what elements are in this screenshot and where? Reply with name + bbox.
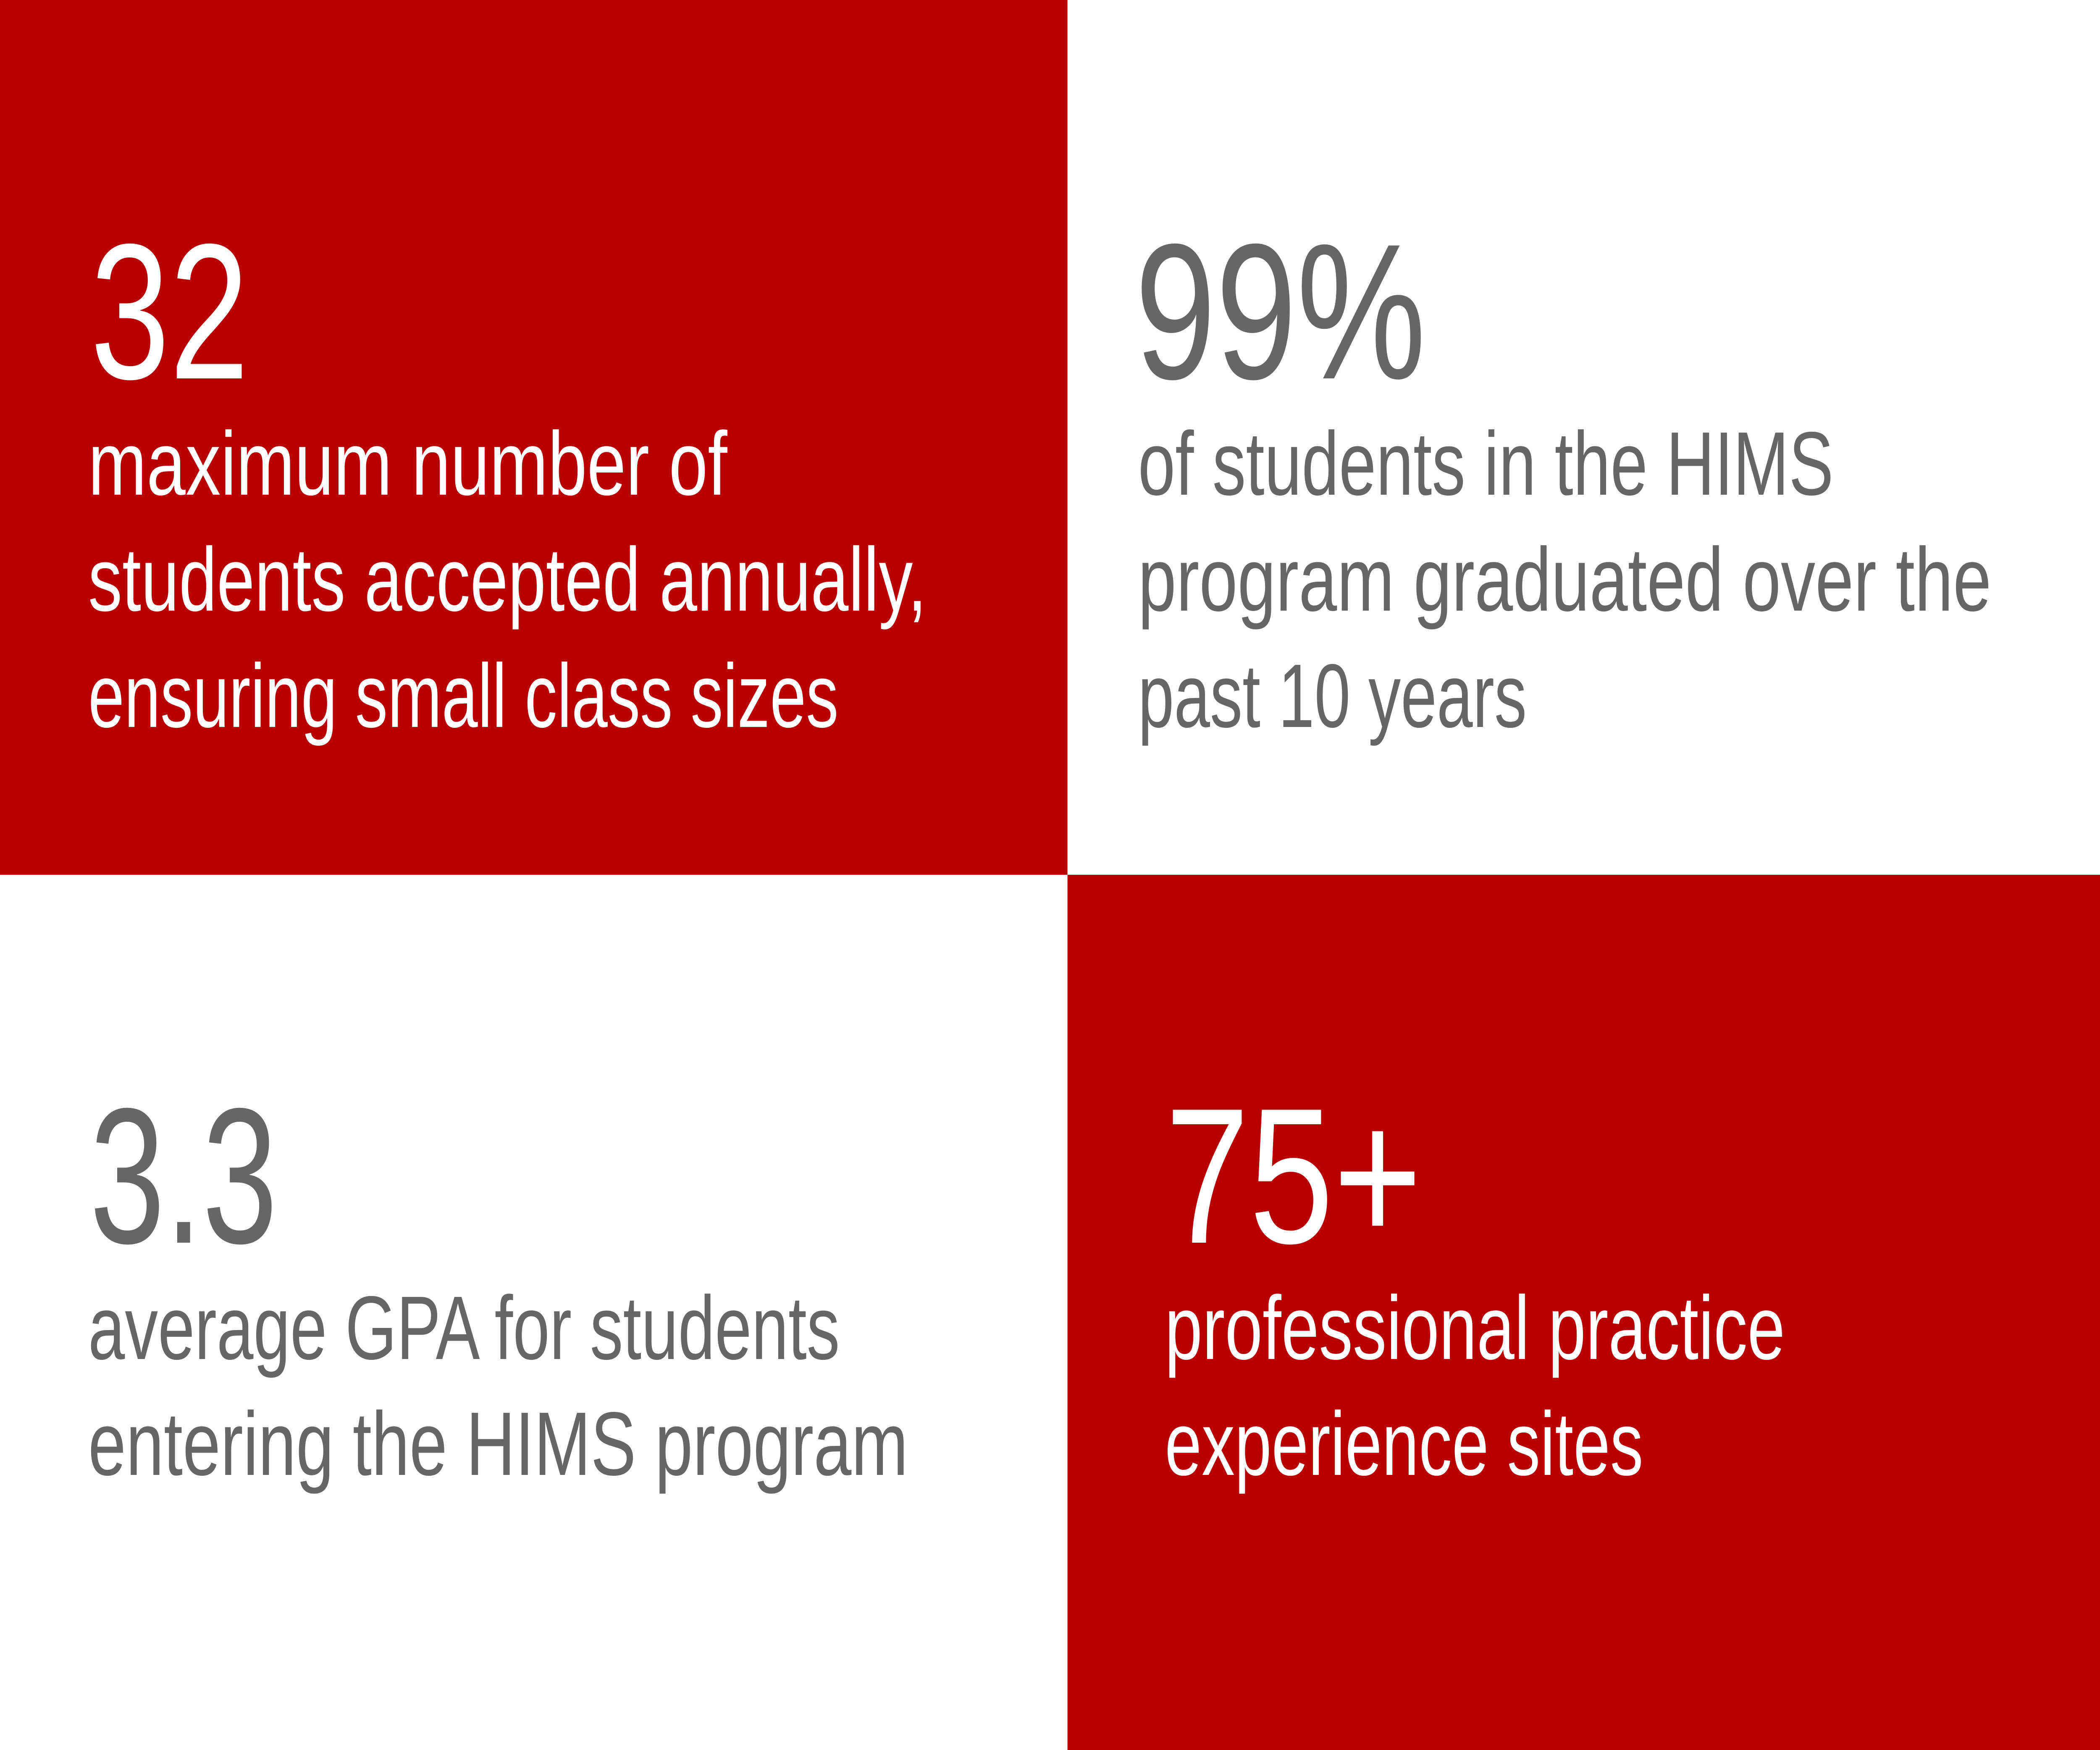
- panel: 99% graduated: [1135, 204, 1991, 746]
- description: maximum number of students: ensuring small class sizes: [88, 646, 838, 746]
- description: professional practice sites: professional practice: [1165, 1278, 1785, 1378]
- stat number: 32: 32: [90, 204, 249, 420]
- panel background: bottom right red: [1068, 875, 2100, 1750]
- description: professional practice sites: experience sites: [1165, 1394, 1643, 1494]
- description: average GPA: average GPA for students: [88, 1278, 840, 1378]
- description: maximum number of students: maximum number of: [88, 414, 728, 514]
- stat number: 99%: 99%: [1135, 204, 1426, 420]
- panel: 32 students: [0, 0, 1068, 875]
- description: average GPA: entering the HIMS program: [88, 1394, 908, 1494]
- panel: 75+ practice sites: [1068, 875, 2100, 1750]
- description: average GPA: [88, 1278, 908, 1494]
- description: students graduated: past 10 years: [1138, 646, 1527, 746]
- stat number: 75+: 75+: [1165, 1068, 1422, 1284]
- description: students graduated: of students in the HIMS: [1138, 414, 1834, 514]
- description: students graduated: program graduated over the: [1138, 530, 1991, 630]
- description: students graduated: [1138, 414, 1991, 746]
- panel: 3.3 GPA: [88, 1068, 908, 1494]
- panel background: top left red: [0, 0, 1068, 875]
- description: maximum number of students: students accepted annually,: [88, 530, 927, 630]
- stat number: 3.3: 3.3: [90, 1068, 278, 1284]
- description: professional practice sites: [1165, 1278, 1785, 1494]
- description: maximum number of students: [88, 414, 927, 746]
